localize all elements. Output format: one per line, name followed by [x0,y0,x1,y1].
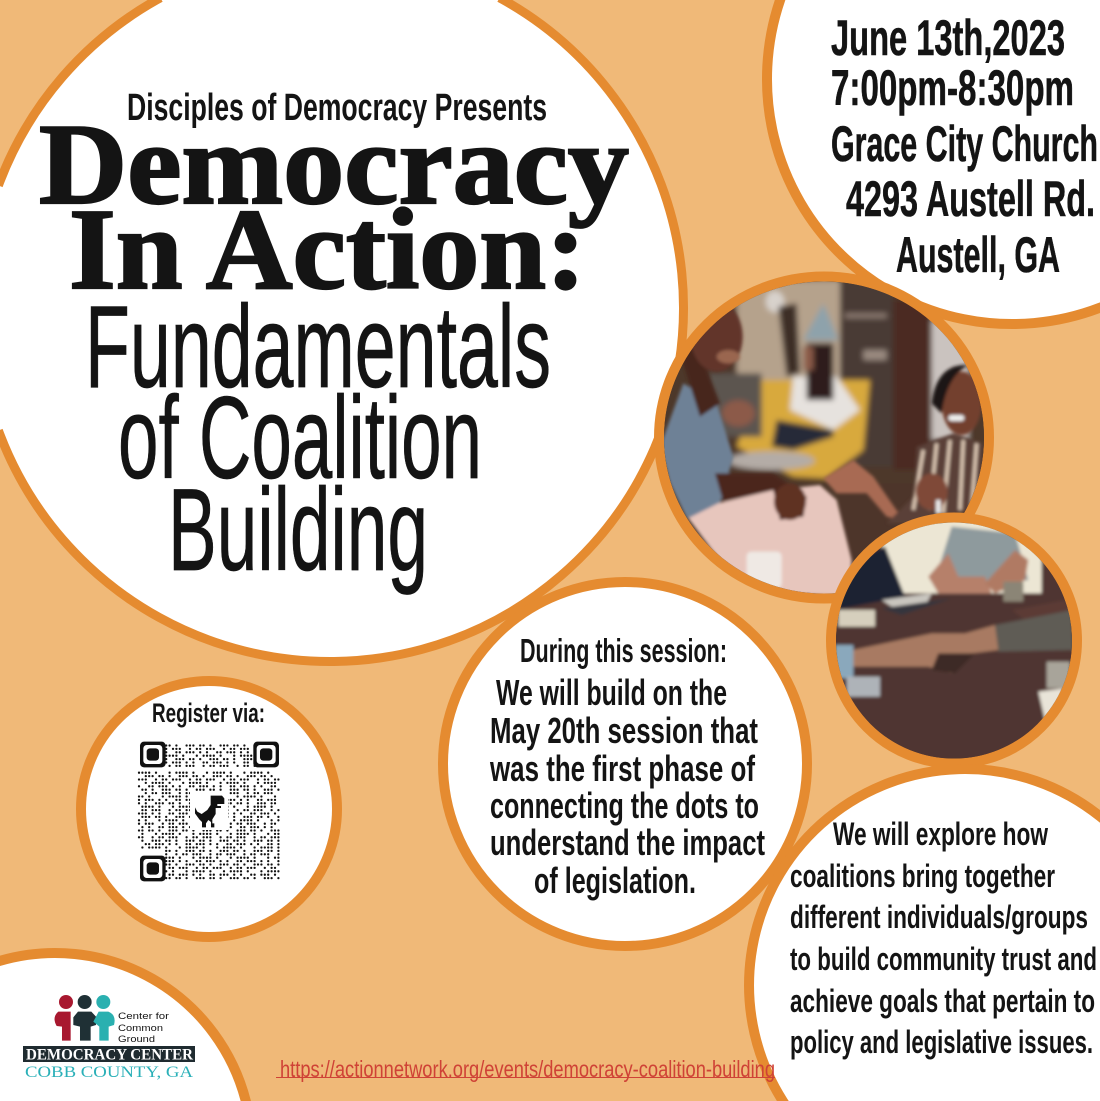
logo: Center for Common Ground: COBB COUNTY, GA [25,1064,194,1081]
session body text: May 20th session that [490,710,758,751]
session body text: was the first phase of [489,748,756,789]
session body text: connecting the dots to [490,785,759,826]
subtitle: Fundamentals of Coalition Building: of Coalition [118,372,482,503]
subtitle: Fundamentals of Coalition Building [85,281,551,595]
presenter line: Disciples of Democracy Presents [127,87,547,129]
session body text: We will build on the [496,672,727,713]
subtitle: Fundamentals of Coalition Building: Building [168,464,428,595]
coalition body text [790,816,1097,1060]
register heading: Register via: [152,698,265,728]
title: Democracy In Action: Democracy [39,101,629,228]
session heading: During this session: [520,632,727,669]
panel: date and location circle [767,0,1100,324]
icon: dinosaur [195,796,224,827]
icon: three people [55,995,115,1041]
logo: Center for Common Ground [23,995,195,1081]
session body text [489,672,765,901]
subtitle: Fundamentals of Coalition Building: Fundamentals [85,281,551,412]
session body text: understand the impact [490,822,765,863]
panel: registration circle [81,681,337,937]
registration link: https://actionnetwork.org/events/democracy-coalition-building [280,1056,775,1082]
logo: Center for Common Ground: DEMOCRACY CENTER [26,1046,194,1064]
panel: logo circle [0,953,246,1101]
panel: coalition description circle [749,769,1100,1101]
session body text: of legislation. [534,860,696,901]
panel: photo of handshake at table [825,510,1085,770]
panel: event title circle [0,0,684,662]
logo: Center for Common Ground: Ground [118,1034,155,1045]
title: Democracy In Action: In Action: [69,186,586,313]
date, time and address text [831,10,1098,283]
QR code [139,742,279,881]
panel: photo of people talking [659,270,1000,610]
panel: session description circle [443,582,807,946]
logo: Center for Common Ground: Common [118,1023,163,1034]
logo: Center for Common Ground: Center for [118,1011,169,1022]
title: Democracy In Action [39,101,629,313]
